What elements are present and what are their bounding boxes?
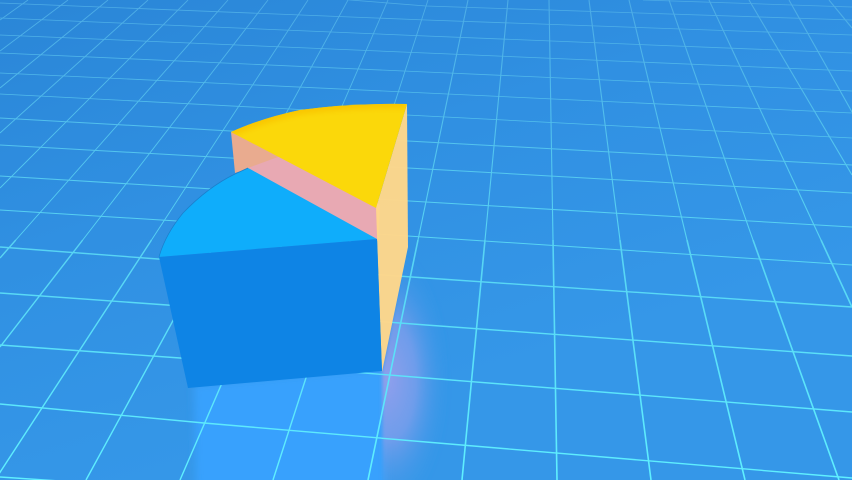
yellow slice: salmon back wall	[231, 132, 300, 173]
yellow slice: pink inner wall	[248, 150, 380, 241]
glow: reflection of orange face	[382, 245, 460, 480]
glow: reflection below blue slice	[194, 368, 386, 480]
yellow slice: darker rim shading	[231, 104, 407, 132]
pie chart	[159, 104, 408, 388]
blue slice: top face	[159, 168, 377, 257]
blue slice: arc edge	[159, 168, 248, 257]
yellow slice: pale orange side face	[376, 104, 408, 372]
yellow slice: top face	[231, 104, 407, 208]
blue slice: front face	[159, 239, 382, 388]
